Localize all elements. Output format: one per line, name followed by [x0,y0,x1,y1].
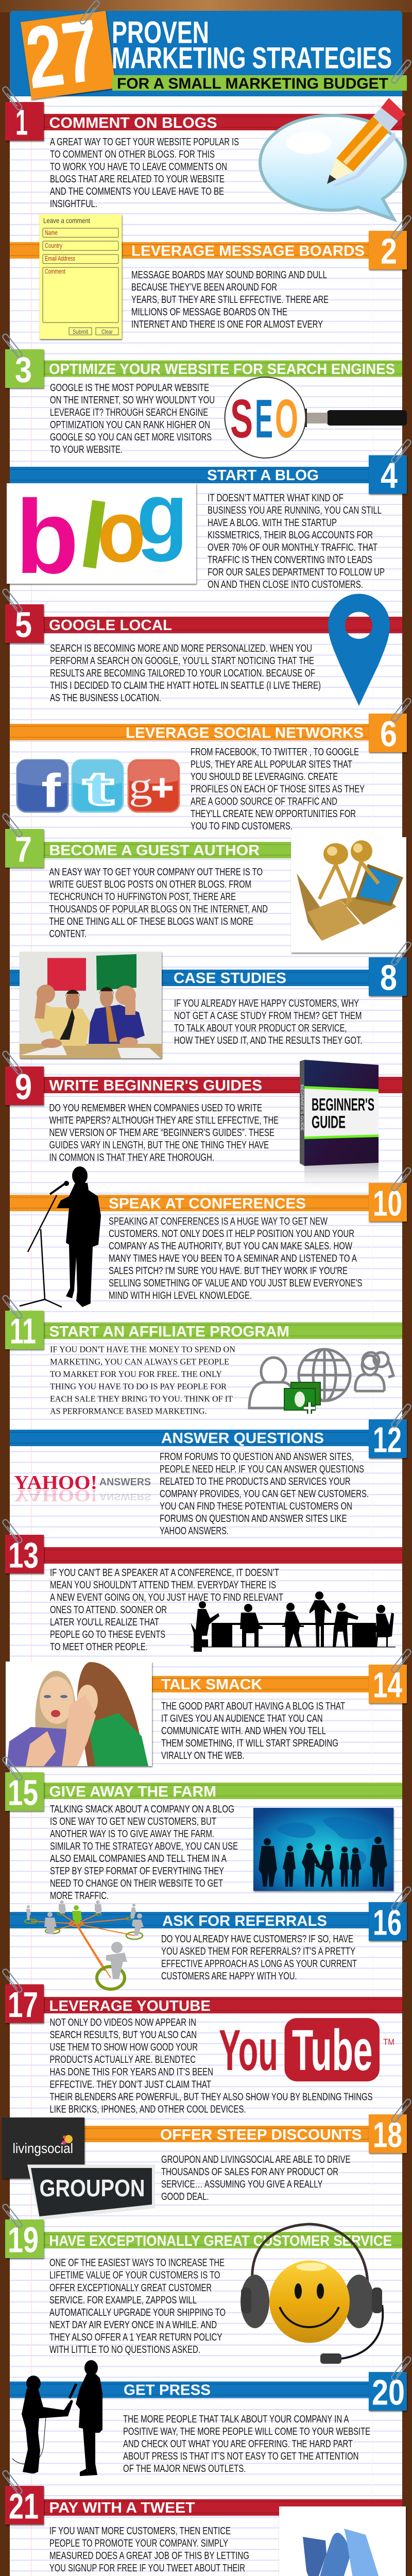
body text: MIND WITH HIGH LEVEL KNOWLEDGE. [109,1290,252,1301]
section bar [10,2232,402,2248]
icon: green money plus [284,1382,320,1414]
section bar [10,617,402,633]
body text [191,746,365,832]
icon: beginner's guide book: GUIDE [312,1113,346,1132]
section bar [10,242,369,259]
body text: IN COMMON IS THAT THEY ARE THOROUGH. [49,1151,214,1163]
body text: GOOGLE IS THE MOST POPULAR WEBSITE [50,382,209,394]
number badge 10: 10 [373,1183,402,1223]
icon: paperclip [390,2098,412,2123]
logo: yahoo answers [14,1472,151,1505]
body text: THE ONE THING ALL OF THESE BLOGS WANT IS MORE [49,916,253,927]
heading: LEVERAGE SOCIAL NETWORKS [126,725,364,741]
blog 3D letters image: b [15,479,79,596]
panel: 17 leverage youtube [2,1968,402,2115]
body text: MEAN YOU SHOULDN’T ATTEND THEM. EVERYDAY THERE IS [50,1579,276,1591]
icon: paperclip [2,2470,23,2495]
body text: SEARCH RESULTS, BUT YOU ALSO CAN [49,2029,197,2041]
number badge 14: 14 [373,1665,402,1705]
body text: YAHOO ANSWERS. [160,1525,229,1537]
body text: ONES TO ATTEND. SOONER OR [50,1604,167,1616]
body text: WRITE GUEST BLOG POSTS ON OTHER BLOGS. FROM [49,878,251,890]
number badge 9 [5,1066,44,1107]
body text: MESSAGE BOARDS MAY SOUND BORING AND DULL [131,269,327,281]
body text [161,1700,345,1761]
icon: twitter [72,760,123,815]
body text: THE GOOD PART ABOUT HAVING A BLOG IS THAT [161,1700,345,1712]
body text: CONTENT. [49,928,87,940]
number badge 20: 20 [372,2372,405,2412]
body text: SEARCH IS BECOMING MORE AND MORE PERSONALIZED. WHEN YOU [50,642,312,654]
number badge 6 [369,714,407,754]
heading: OFFER STEEP DISCOUNTS [160,2127,362,2143]
number badge 13: 13 [8,1535,39,1575]
body text: THEY'LL CREATE NEW OPPORTUNITIES FOR [191,808,356,820]
icon: facebook [17,760,68,817]
logo: youtube [219,2018,394,2082]
icon: paperclip [2,1968,23,1993]
heading: SPEAK AT CONFERENCES [109,1195,306,1212]
blog 3D letters image: g [136,465,188,562]
icon: paperclip [390,1167,412,1192]
number badge 5 [5,604,44,645]
panel: 6 leverage social networks [10,698,412,832]
section bar [10,1547,402,1564]
body text [160,1451,369,1537]
number badge 9: 9 [15,1066,32,1107]
logo: livingsocial [2,2117,84,2178]
logo: yahoo answers: YAHOO! [14,1486,97,1505]
heading: OPTIMIZE YOUR WEBSITE FOR SEARCH ENGINES [49,361,395,378]
body text: GOOGLE SO YOU CAN GET MORE VISITORS [50,431,212,443]
blog 3D letters image: o [97,483,146,581]
number badge 1 [5,102,44,142]
icon: paperclip [390,2356,412,2381]
body text [174,997,363,1046]
icon: paperclip [2,813,23,838]
header panel [10,0,407,108]
panel: 1 comment on blogs [2,86,406,219]
panel: 9 write beginner's guides [2,1050,402,1193]
body text: NEXT DAY AIR EVERY ONCE IN A WHILE. AND [49,2319,217,2331]
sticky note: comment form: Submit [73,328,89,335]
icon: paperclip [2,1050,23,1075]
number badge 8: 8 [380,957,397,997]
section bar [10,1783,402,1799]
body text: OPTIMIZATION YOU CAN RANK HIGHER ON [50,419,210,431]
logo: yahoo answers: ANSWERS [99,1492,151,1502]
blog 3D letters image [7,465,196,596]
body text: VIRALLY ON THE WEB. [161,1750,244,1761]
logo: youtube: You [219,2018,278,2082]
body text (serif): THING YOU HAVE TO DO IS PAY PEOPLE FOR [50,1382,227,1391]
body text: THIS I DECIDED TO CLAIM THE HYATT HOTEL IN SEATTLE (I LIVE THERE) [50,680,321,691]
icons: person, globe, group, money [249,1349,393,1408]
body text: ON THE INTERNET, SO WHY WOULDN’T YOU [50,394,215,406]
body text: RESULTS ARE BECOMING TAILORED TO YOUR LOCATION. BECAUSE OF [50,667,315,679]
body text: INTERNET AND THERE IS ONE FOR ALMOST EVERY [131,318,323,330]
panel: 15 give away the farm [2,1756,402,1902]
icon: speaker silhouette [20,1166,101,1307]
number badge 3 [5,349,44,389]
number badge 4: 4 [381,455,398,496]
body text: HAVE A BLOG. WITH THE STARTUP [208,517,337,529]
heading: WRITE BEGINNER'S GUIDES [49,1078,262,1094]
body text (serif): EACH SALE THEY BRING TO YOU. THINK OF IT [50,1394,233,1403]
body text: THEY ALSO OFFER A 1 YEAR RETURN POLICY [49,2331,222,2343]
body text: YEARS, BUT THEY ARE STILL EFFECTIVE. THERE ARE [131,294,329,306]
body text: SERVICE… ASSUMING YOU GIVE A REALLY [161,2178,323,2190]
body text [208,492,385,590]
logo: groupon: GROUPON [39,2175,145,2201]
icon: meeting silhouette [191,1591,396,1652]
icon: SEO magnifying glass [225,377,407,458]
number badge 8 [369,957,407,997]
section bar [84,2126,369,2142]
body text: USE THEM TO SHOW HOW GOOD YOUR [49,2041,198,2053]
heading: LEVERAGE MESSAGE BOARDS [131,243,365,260]
body text: LATER YOU'LL REALIZE THAT [50,1616,159,1628]
body text [109,1215,363,1301]
body text: IT DOESN’T MATTER WHAT KIND OF [208,492,344,504]
heading: CASE STUDIES [174,970,286,987]
orange tilted tag with 27: 27 [21,1,105,108]
panel: 4 start a blog [7,439,412,596]
title [112,15,392,75]
body text: LIKE BRICKS, IPHONES, AND OTHER COOL DEVICES. [49,2103,246,2115]
body text: WHITE PAPERS? ALTHOUGH THEY ARE STILL EFFECTIVE, THE [49,1114,279,1126]
number badge 2: 2 [381,231,397,271]
panel: 18 offer steep discounts [2,2098,412,2220]
icon: paperclip [2,2204,23,2228]
body text: GUIDES VARY IN LENGTH, BUT THE ONE THING THEY HAVE [49,1139,269,1151]
icon: paperclip [2,1756,23,1781]
number badge 2 [369,231,407,271]
body text: BECAUSE THEY’VE BEEN AROUND FOR [131,281,277,293]
section bar [10,2381,369,2398]
sticky note: comment form: Email Address [45,255,75,262]
body text: COMMUNICATE WITH. AND WHEN YOU TELL [161,1725,326,1737]
body text: SPEAKING AT CONFERENCES IS A HUGE WAY TO GET NEW [109,1215,328,1227]
icon: paperclip [390,1886,412,1911]
icon: paperclip on ribbon [390,59,412,84]
body text: OFFER EXCEPTIONALLY GREAT CUSTOMER [49,2282,212,2294]
heading: COMMENT ON BLOGS [49,115,217,131]
panel: 21 pay with a tweet [2,2470,406,2576]
number badge 18: 18 [373,2114,402,2155]
section bar [10,1430,369,1446]
section bar [10,114,402,130]
section bar [10,1077,402,1093]
image: business silhouettes on globe [253,1808,393,1891]
number badge 21: 21 [9,2486,39,2527]
panel: 3 optimize for search engines [2,333,407,458]
body text: SERVICE. FOR EXAMPLE, ZAPPOS WILL [49,2294,197,2306]
photo: two men holding cards [20,952,162,1058]
panel: 13 attend conferences [2,1519,402,1653]
icon: paperclip [2,588,23,613]
body text: SIMILAR TO THE STRATEGY ABOVE, YOU CAN USE [50,1840,238,1852]
heading: START AN AFFILIATE PROGRAM [49,1324,289,1340]
icon: twitter: t [83,762,114,815]
number badge 6: 6 [380,714,397,754]
logo: yahoo answers: YAHOO! [14,1472,97,1494]
logo card: simply measured [279,2506,406,2576]
body text: IF YOU CAN'T BE A SPEAKER AT A CONFERENCE, IT DOESN’T [50,1567,279,1579]
logo: livingsocial: livingsocial [12,2141,73,2156]
body text: TO COMMENT ON OTHER BLOGS. FOR THIS [50,148,215,160]
sticky note: comment form: Comment [45,268,65,275]
number badge 19: 19 [8,2219,39,2260]
icon: beginner's guide book: BEGINNER'S GUIDE [300,1084,304,1131]
body text: TALKING SMACK ABOUT A COMPANY ON A BLOG [50,1803,234,1815]
body text [161,1933,357,1982]
heading: GET PRESS [124,2382,211,2399]
icon: paperclip [390,215,412,240]
body text: IS ONE WAY TO GET NEW CUSTOMERS, BUT [50,1816,216,1827]
body text: TO MEET OTHER PEOPLE. [50,1641,148,1653]
number badge 12: 12 [373,1420,402,1460]
icon: paperclip [2,1295,23,1319]
body text: FORUMS ON QUESTION AND ANSWER SITES LIKE [160,1513,347,1524]
body text [50,642,321,704]
body text [50,1803,238,1902]
body text: PRODUCTS ACTUALLY ARE. BLENDTEC [49,2054,196,2065]
body text: YOU SIGNUP FOR FREE IF YOU TWEET ABOUT THEIR [49,2562,245,2574]
sticky note: comment form: Clear [101,328,113,335]
icon: beginner's guide book [300,1060,379,1193]
body text [49,1102,279,1163]
panel: 19 customer service [2,2204,402,2364]
body text: A NEW EVENT GOING ON, YOU JUST HAVE TO FIND RELEVANT [50,1591,283,1603]
heading: GOOGLE LOCAL [49,617,172,634]
photo: two women whispering [6,1662,152,1766]
body text: OF THE MAJOR NEWS OUTLETS. [123,2463,246,2475]
body text: LEVERAGE IT? THROUGH SEARCH ENGINE [50,406,208,418]
body text [50,1567,283,1653]
icon: facebook: f [41,765,61,817]
subtitle ribbon: FOR A SMALL MARKETING BUDGET [117,75,388,92]
section bar [10,361,402,377]
body text [49,2016,373,2115]
number badge 4 [369,455,407,496]
icon: paperclip [390,698,412,722]
section bar [10,2499,402,2516]
body text: TO TALK ABOUT YOUR PRODUCT OR SERVICE, [174,1022,347,1034]
section bar [152,1676,369,1692]
logo: groupon [27,2165,155,2220]
icon: SEO magnifying glass: S [230,388,253,449]
body text: THOUSANDS OF POPULAR BLOGS ON THE INTERNET, AND [49,903,268,915]
icon: SEO magnifying glass: O [275,388,298,449]
panel: 12 answer questions [10,1403,412,1537]
heading: GIVE AWAY THE FARM [49,1784,216,1800]
body text (serif): MARKETING, YOU CAN ALWAYS GET PEOPLE [50,1357,229,1366]
body text: THOUSANDS OF SALES FOR ANY PRODUCT OR [161,2166,338,2178]
gold figures with laptops image [291,837,406,953]
body text: AS THE BUSINESS LOCATION. [50,692,161,704]
number badge 1: 1 [15,102,28,142]
body text [131,269,329,330]
section bar [10,1997,402,2013]
body text: PERFORM A SEARCH ON GOOGLE, YOU’LL START NOTICING THAT THE [50,655,314,667]
sticky note: comment form [39,214,122,339]
icon: map pin [328,594,390,706]
body text (serif): TO MARKET FOR YOU FOR FREE. THE ONLY [50,1369,222,1379]
body text: STEP BY STEP FORMAT OF EVERYTHING THEY [50,1865,224,1877]
body text: AN EASY WAY TO GET YOUR COMPANY OUT THERE IS TO [49,866,263,878]
icon: paperclip [390,1649,412,1673]
body text [123,2413,370,2475]
body text: ANOTHER WAY IS TO GIVE AWAY THE FARM. [50,1828,214,1840]
body text: HAS DONE THIS FOR YEARS AND IT'S BEEN [49,2066,213,2078]
body text [161,2154,350,2202]
body text: INSIGHTFUL. [50,198,97,210]
logo: youtube: TM [383,2037,394,2047]
body text: TECHCRUNCH TO HUFFINGTON POST, THERE ARE [49,891,236,903]
body text (serif): AS PERFORMANCE BASED MARKETING. [50,1406,207,1416]
logo: yahoo answers: ANSWERS [99,1477,151,1488]
title: PROVEN [112,15,209,49]
section bar [10,724,369,740]
body text: PLUS, THEY ARE ALL POPULAR SITES THAT [191,758,352,770]
icon: paperclip [2,333,23,358]
panel: 20 get press [10,2356,412,2476]
body text: BLOGS THAT ARE RELATED TO YOUR WEBSITE [50,173,225,185]
section bar [10,1912,369,1928]
body text: ALSO EMAIL COMPANIES AND TELL THEM IN A [50,1853,227,1865]
number badge 7 [5,829,44,870]
section bar [10,467,369,483]
heading: BECOME A GUEST AUTHOR [49,842,260,859]
icon: google plus [128,760,179,812]
blog 3D letters image: l [74,483,114,589]
body text: THEM SOMETHING, IT WILL START SPREADING [161,1737,338,1749]
body text: GOOD DEAL. [161,2191,209,2202]
number badge 7: 7 [15,829,32,870]
body text: YOU SHOULD BE LEVERAGING. CREATE [191,771,338,783]
body text: MILLIONS OF MESSAGE BOARDS ON THE [131,306,287,318]
body text: MORE TRAFFIC. [50,1890,109,1902]
body text: ONE OF THE EASIEST WAYS TO INCREASE THE [49,2257,225,2269]
panel: 14 talk smack [6,1649,412,1766]
body text: NEED TO CHANGE ON THEIR WEBSITE TO GET [50,1877,223,1889]
panel: 5 google local [2,588,402,706]
icon: paperclip [79,0,100,25]
body text [49,866,268,940]
panel: 11 start an affiliate program [2,1295,402,1416]
sticky note: comment form: Leave a comment [43,216,90,225]
body text: YOU TO FIND CUSTOMERS. [191,820,293,832]
body text: TO YOUR WEBSITE. [50,444,123,455]
heading: ASK FOR REFERRALS [162,1913,327,1929]
section bar [10,1323,402,1339]
heading: TALK SMACK [161,1676,262,1693]
body text: NOT ONLY DO VIDEOS NOW APPEAR IN [49,2016,196,2028]
body text: LIFETIME VALUE OF YOUR CUSTOMERS IS TO [49,2269,220,2281]
section bar [10,1195,369,1211]
number badge 15: 15 [8,1772,38,1812]
body text: A GREAT WAY TO GET YOUR WEBSITE POPULAR IS [50,136,239,148]
body text: MEASURED DOES A GREAT JOB OF THIS BY LETTING [49,2550,249,2562]
icon: speech bubble with pencil [260,98,406,219]
social icons [17,760,179,817]
icon: paperclip [2,86,23,111]
body text [50,136,239,210]
number badge 16: 16 [373,1902,402,1942]
body text: PEOPLE GO TO THESE EVENTS [50,1629,165,1640]
icon: SEO magnifying glass: E [255,388,273,449]
number badge 3: 3 [15,349,32,389]
panel: 7 become a guest author [2,813,406,953]
heading: START A BLOG [207,467,319,484]
body text (serif): IF YOU DON'T HAVE THE MONEY TO SPEND ON [50,1345,235,1354]
body text [50,382,215,455]
number badge 17: 17 [8,1985,38,2025]
number badge 5: 5 [15,605,32,645]
panel: 8 case studies [10,941,412,1058]
body text [49,2257,226,2355]
heading: LEVERAGE YOUTUBE [49,1998,211,2014]
body text [49,2525,249,2576]
body text: WITH LITTLE TO NO QUESTIONS ASKED. [49,2344,200,2355]
body text: NEW VERSION OF THEM ARE “BEGINNER'S GUIDES”. THESE [49,1127,274,1139]
body text: TO WORK YOU HAVE TO LEAVE COMMENTS ON [50,161,227,173]
body text: IF YOU WANT MORE CUSTOMERS, THEN ENTICE [49,2525,231,2537]
body text: PEOPLE TO PROMOTE YOUR COMPANY. SIMPLY [49,2537,228,2549]
body text: DO YOU REMEMBER WHEN COMPANIES USED TO WRITE [49,1102,262,1114]
icon: smiley with headset [241,2224,383,2364]
heading: PAY WITH A TWEET [49,2500,195,2516]
body text: AUTOMATICALLY UPGRADE YOUR SHIPPING TO [49,2307,226,2318]
number badge 11: 11 [10,1311,36,1351]
sticky note: comment form: Name [45,229,58,236]
panel: 10 speak at conferences [10,1166,412,1307]
panel: 16 ask for referrals [10,1886,412,1989]
icon: google plus: g [129,765,152,807]
sticky note: comment form: Country [45,242,63,249]
panel: 2 leverage message boards [10,215,412,330]
body text: CUSTOMERS ARE HAPPY WITH YOU. [161,1970,297,1982]
icon: paperclip [390,1403,412,1428]
body text (serif) [50,1345,235,1416]
icon: paperclip [390,941,412,966]
icon: paperclip [2,1519,23,1544]
body text: EFFECTIVE. THEY DON'T JUST CLAIM THAT [49,2078,211,2091]
body text: ARE A GOOD SOURCE OF TRAFFIC AND [191,795,337,807]
section bar [10,970,369,986]
body text: AND THE COMMENTS YOU LEAVE HAVE TO BE [50,185,224,197]
icon: paperclip [390,439,412,464]
body text: IT GIVES YOU AN AUDIENCE THAT YOU CAN [161,1713,322,1724]
icon: referral network [25,1900,144,1989]
heading: ANSWER QUESTIONS [161,1430,324,1447]
section bar [10,842,291,858]
icon: interview silhouettes [12,2360,102,2476]
